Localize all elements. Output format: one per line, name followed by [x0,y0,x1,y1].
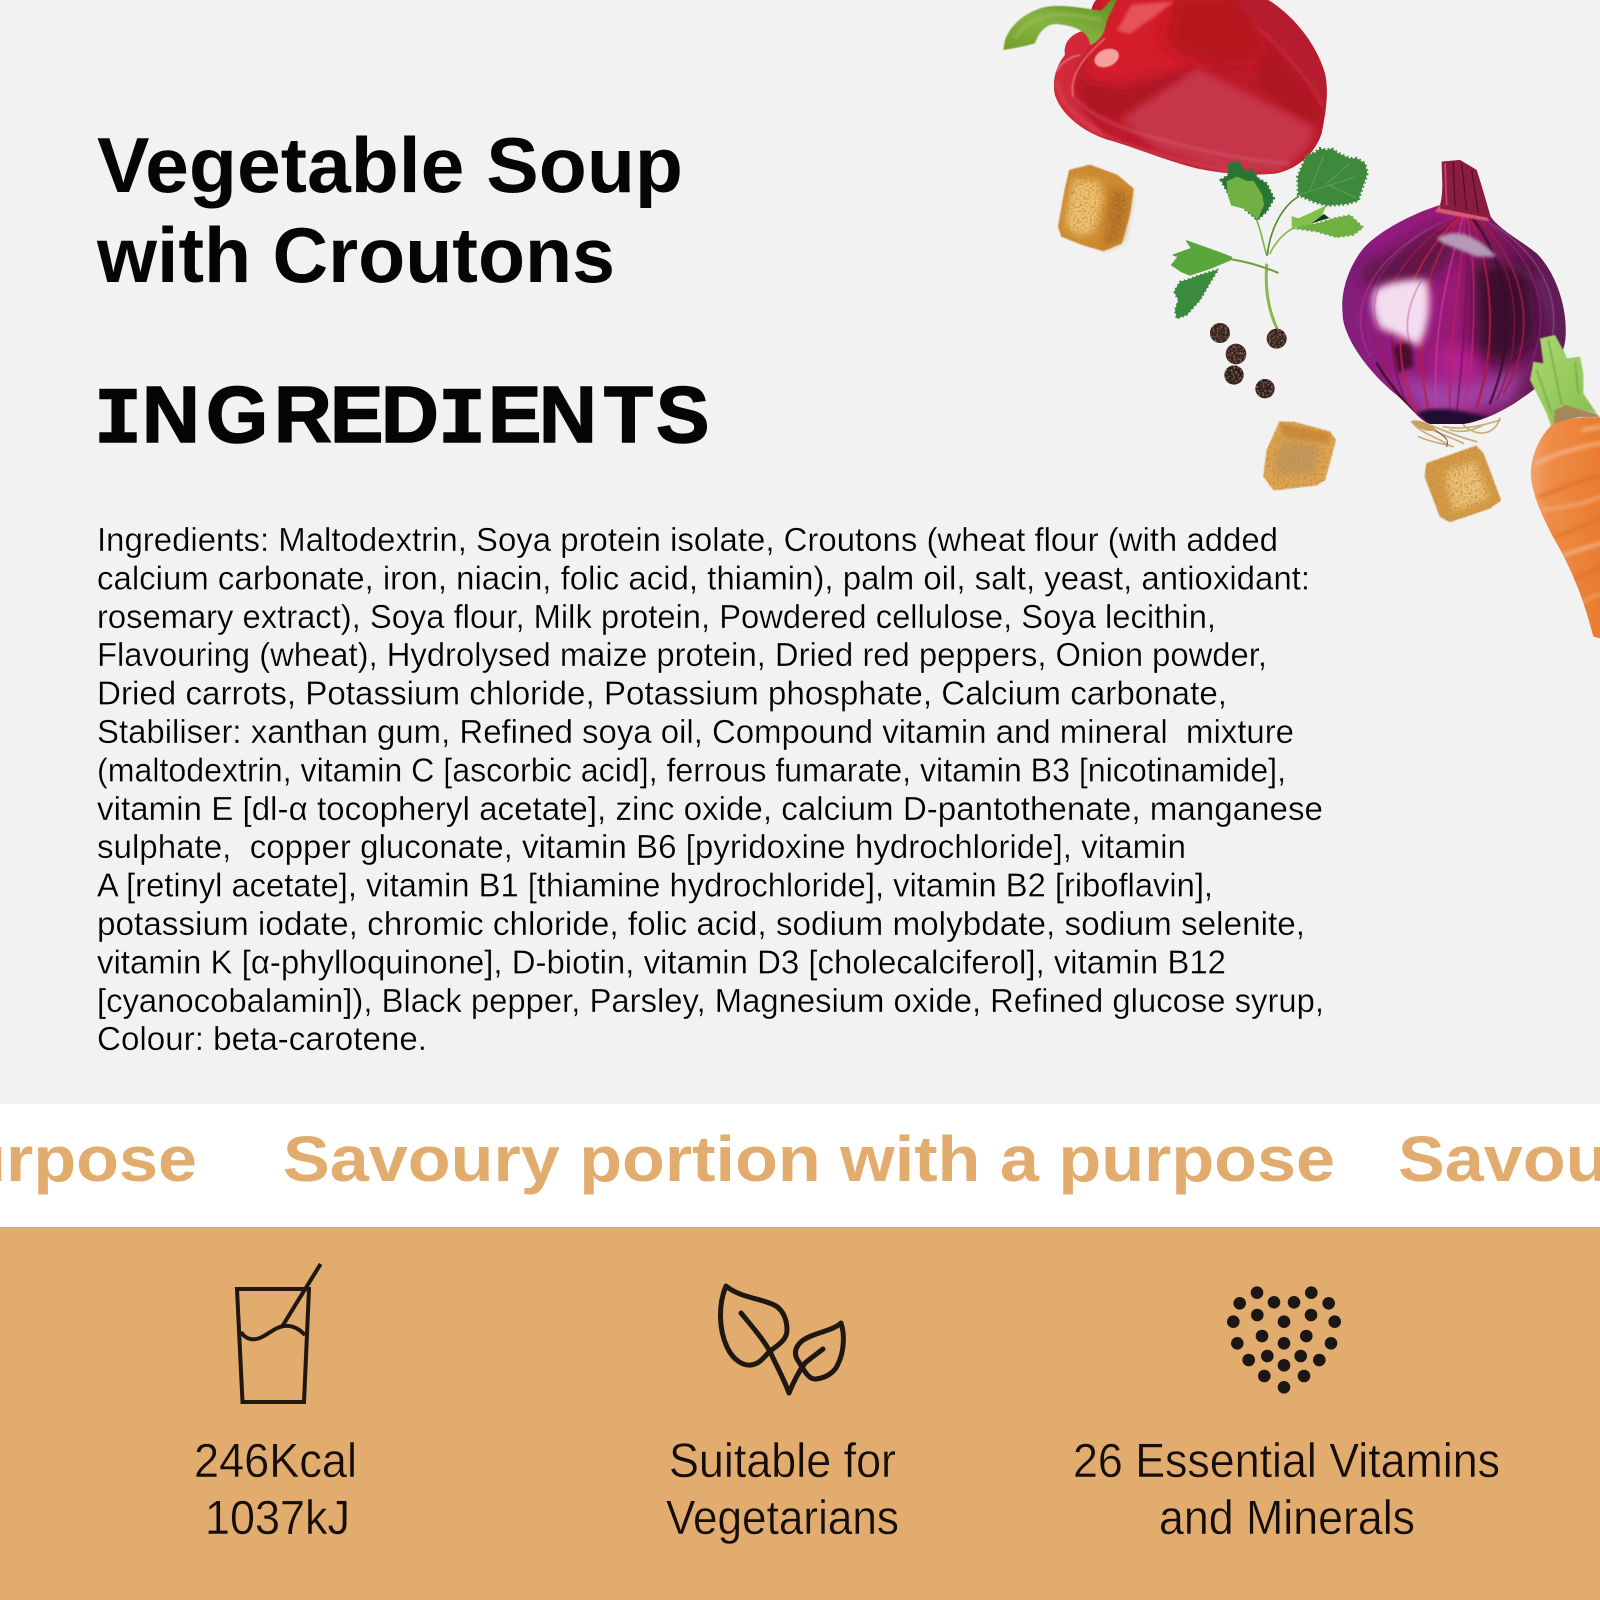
heading: ingredients: I [94,376,142,467]
ingredients text block: A [retinyl acetate], vitamin B1 [thiamine hydrochloride], vitamin B2 [riboflavin], [97,867,1213,904]
ingredients text block: [cyanocobalamin]), Black pepper, Parsley, Magnesium oxide, Refined glucose syrup, [97,982,1324,1019]
icon: glass with straw [237,1264,321,1402]
title: Vegetable Soup [97,121,683,209]
ingredients text block: rosemary extract), Soya flour, Milk protein, Powdered cellulose, Soya lecithin, [97,598,1216,635]
heading: ingredients: R [274,370,332,459]
ingredients text block: vitamin K [α-phylloquinone], D-biotin, vitamin D3 [cholecalciferol], vitamin B12 [97,943,1226,980]
heading: ingredients: N [142,370,200,459]
heading: ingredients: T [604,370,653,459]
icon: two leaves [720,1286,843,1393]
text: energy: 1037kJ [205,1492,350,1545]
illustration: carrot [1527,335,1600,643]
heading: ingredients: E [330,370,383,459]
icon: heart of dots [1227,1286,1341,1394]
text: vegetarians: Vegetarians [666,1492,899,1545]
text: vitamins and minerals: 26 Essential Vitamins [1073,1435,1500,1488]
heading: ingredients: E [488,370,541,459]
heading: ingredients: D [381,370,439,459]
ingredients text block: Flavouring (wheat), Hydrolysed maize protein, Dried red peppers, Onion powder, [97,636,1267,673]
ingredients text block [97,521,1324,1057]
ingredients text block: Dried carrots, Potassium chloride, Potassium phosphate, Calcium carbonate, [97,675,1227,712]
heading: ingredients: I [438,376,486,467]
ingredients text block: potassium iodate, chromic chloride, folic acid, sodium molybdate, sodium selenite, [97,905,1305,942]
title [96,121,683,299]
heading: ingredients: N [539,370,597,459]
heading: ingredients: G [206,370,268,459]
text: vitamins and minerals: and Minerals [1159,1492,1415,1545]
ingredients text block: Colour: beta-carotene. [97,1020,427,1057]
panel: product benefits [0,1227,1600,1600]
slogan band: Savoury portion with a purpose [283,1123,1335,1195]
ingredients text block: sulphate, copper gluconate, vitamin B6 [pyridoxine hydrochloride], vitamin [97,828,1186,865]
text: vegetarians: Suitable for [669,1435,896,1488]
ingredients text block: calcium carbonate, iron, niacin, folic acid, thiamin), palm oil, salt, yeast, antioxidant: [97,559,1310,596]
illustration: crouton lower right [1426,447,1500,521]
title: with Croutons [96,211,615,299]
illustration: red bell pepper [1003,0,1333,177]
heading: ingredients: S [656,370,709,459]
illustration: peppercorns [1210,323,1287,398]
ingredients text block: Stabiliser: xanthan gum, Refined soya oil, Compound vitamin and mineral mixture [97,713,1294,750]
text: energy [194,1435,357,1545]
slogan band [0,1104,1600,1227]
ingredients text block: Ingredients: Maltodextrin, Soya protein isolate, Croutons (wheat flour (with added [97,521,1278,558]
text: vitamins and minerals [1073,1435,1500,1545]
text: energy: 246Kcal [194,1435,357,1488]
illustration: red onion [1337,157,1573,447]
ingredients text block: (maltodextrin, vitamin C [ascorbic acid], ferrous fumarate, vitamin B3 [nicotinamide], [97,751,1286,788]
illustration: parsley sprig [1172,148,1367,329]
text: vegetarians [666,1435,899,1545]
illustration: crouton centre [1264,423,1335,489]
ingredients text block: vitamin E [dl-α tocopheryl acetate], zinc oxide, calcium D-pantothenate, manganese [97,790,1323,827]
illustration: crouton top left [1059,166,1133,250]
